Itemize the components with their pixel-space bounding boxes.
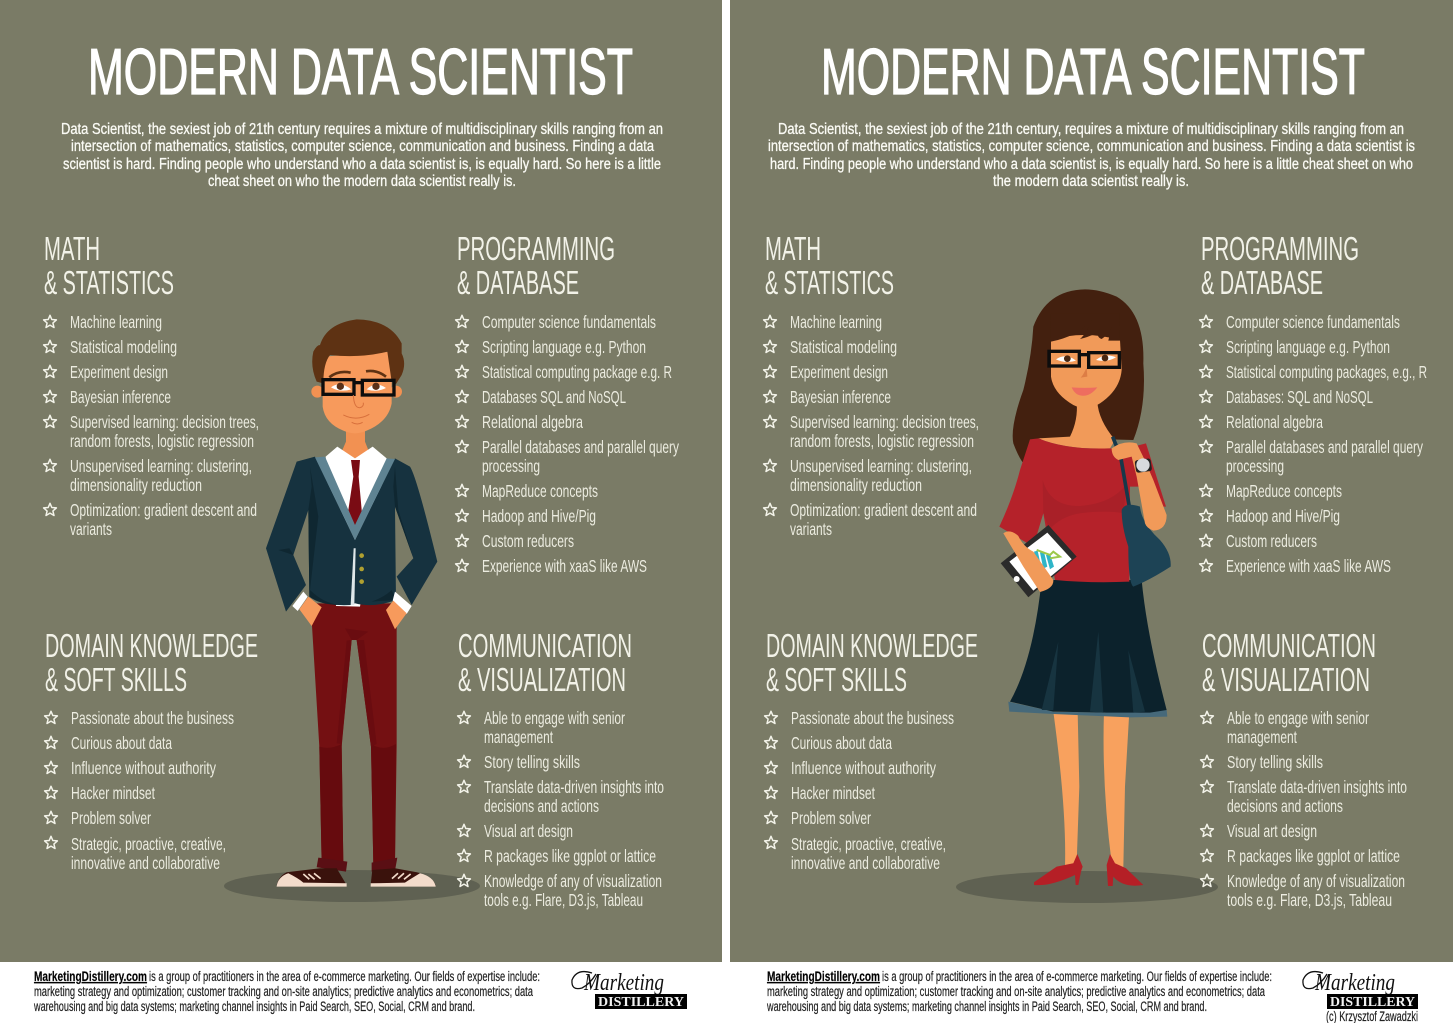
placket <box>351 548 356 605</box>
hair <box>312 319 404 384</box>
list: domain skills (left) <box>45 708 234 873</box>
list: communication skills (right) <box>1201 708 1407 910</box>
footer text: right: warehousing and big data systems; marketing channel insights in Paid Search, SEO, Social, CRM and brand. <box>766 999 1207 1014</box>
list: domain skills (left): Hacker mindset <box>71 783 155 803</box>
top shading <box>1043 480 1127 530</box>
list: communication skills (left): decisions and actions <box>484 796 599 816</box>
list: domain skills (left): Influence without authority <box>71 758 216 778</box>
list: domain skills (right): Hacker mindset <box>791 783 875 803</box>
shoes <box>277 868 436 887</box>
bag <box>1113 437 1171 587</box>
list: programming skills (right): Relational algebra <box>1226 412 1323 432</box>
list: programming skills (left): Parallel databases and parallel query <box>482 437 679 457</box>
heading: programming and database (right): & DATABASE <box>1201 264 1323 301</box>
ground shadow: woman <box>956 871 1218 903</box>
face <box>323 352 392 433</box>
logo: left: Marketing <box>583 970 664 996</box>
list: math skills (right): Optimization: gradient descent and <box>790 500 977 520</box>
list: math skills (right): Supervised learning: decision trees, <box>790 412 979 432</box>
heading: programming and database (left) <box>457 230 615 301</box>
list: programming skills (right): processing <box>1226 456 1284 476</box>
illustration: man lower body <box>277 603 436 887</box>
heading: programming and database (right) <box>1201 230 1359 301</box>
illustration: man upper body <box>266 319 437 629</box>
footer text: right <box>766 969 1272 1014</box>
intro text: right <box>768 121 1415 190</box>
list: communication skills (right): Visual art design <box>1227 821 1317 841</box>
footer text: right: MarketingDistillery.com <box>767 969 880 984</box>
list: communication skills (left): Translate data-driven insights into <box>484 777 664 797</box>
list: communication skills (left): tools e.g. Flare, D3.js, Tableau <box>484 890 643 910</box>
list: programming skills (left): Hadoop and Hive/Pig <box>482 506 596 526</box>
list: math skills (left): random forests, logistic regression <box>70 431 254 451</box>
list: programming skills (left): Relational algebra <box>482 412 583 432</box>
heading: communication and visualization (left): COMMUNICATION <box>458 627 632 664</box>
intro text: left: scientist is hard. Finding people who understand who a data scientist is, is equally hard. So here is a little <box>63 156 661 173</box>
list: math skills (left): Experiment design <box>70 362 168 382</box>
heading: math and statistics (left): & STATISTICS <box>44 264 174 301</box>
list: communication skills (right): Able to engage with senior <box>1227 708 1369 728</box>
footer text: left: marketing strategy and optimization; customer tracking and on-site analytics; predictive analytics and econometrics; data <box>34 984 533 999</box>
list: programming skills (left): Experience with xaaS like AWS <box>482 556 647 576</box>
list: communication skills (left): Able to engage with senior <box>484 708 625 728</box>
list: programming skills (left): Computer science fundamentals <box>482 312 656 332</box>
logo: left: DISTILLERY <box>598 995 684 1010</box>
heading: math and statistics (left) <box>44 230 174 301</box>
nose and mouth <box>343 395 369 424</box>
list: math skills (right): Experiment design <box>790 362 888 382</box>
illustration: woman lower body <box>1008 580 1167 886</box>
shirt <box>326 447 387 607</box>
skirt <box>1010 580 1167 713</box>
footer text: left: is a group of practitioners in the area of e-commerce marketing. Our fields of expertise include: <box>149 969 540 984</box>
title: left: MODERN DATA SCIENTIST <box>88 35 633 108</box>
list: math skills (left): dimensionality reduction <box>70 475 202 495</box>
face <box>1051 335 1122 408</box>
list: math skills (right): Machine learning <box>790 312 882 332</box>
intro text: left <box>61 121 663 190</box>
skirt pleats <box>1042 632 1145 713</box>
heading: math and statistics (right): MATH <box>765 230 821 267</box>
list: domain skills (right): Strategic, proactive, creative, <box>791 834 946 854</box>
list: math skills (right) <box>764 312 979 539</box>
red top <box>999 438 1166 582</box>
nose <box>1081 367 1087 378</box>
footer text: right: is a group of practitioners in the area of e-commerce marketing. Our fields of expertise include: <box>882 969 1272 984</box>
list: domain skills (right) <box>765 708 954 873</box>
heading: communication and visualization (left) <box>458 627 632 698</box>
logo: right: Marketing <box>1314 970 1395 996</box>
illustration: woman upper body <box>999 289 1171 597</box>
list: domain skills (right): Influence without authority <box>791 758 936 778</box>
heading: programming and database (right): PROGRAMMING <box>1201 230 1359 267</box>
heading: domain knowledge and soft skills (right): & SOFT SKILLS <box>766 661 907 698</box>
neck and chest <box>1038 402 1115 449</box>
list: math skills (right): Statistical modeling <box>790 337 897 357</box>
list: programming skills (right): MapReduce concepts <box>1226 481 1342 501</box>
logo: right <box>1303 970 1418 1010</box>
heading: domain knowledge and soft skills (left) <box>45 627 258 698</box>
intro text: right: the modern data scientist really is. <box>993 173 1189 190</box>
trousers <box>311 603 397 872</box>
panel: left background <box>0 0 722 962</box>
logo: right: DISTILLERY <box>1330 995 1415 1010</box>
list: domain skills (right): innovative and collaborative <box>791 853 940 873</box>
list: math skills (right): Bayesian inference <box>790 387 891 407</box>
tie <box>348 460 362 527</box>
heading: math and statistics (right): & STATISTICS <box>765 264 894 301</box>
heading: math and statistics (left): MATH <box>44 230 100 267</box>
list: communication skills (right): Story telling skills <box>1227 752 1323 772</box>
list: programming skills (left): Scripting language e.g. Python <box>482 337 646 357</box>
eyes <box>1056 355 1116 362</box>
hands <box>299 597 407 629</box>
cuffs <box>292 592 412 614</box>
lapels <box>315 457 395 540</box>
intro text: left: cheat sheet on who the modern data scientist really is. <box>208 173 516 190</box>
list: domain skills (left): Passionate about the business <box>71 708 234 728</box>
buttons <box>359 553 364 584</box>
legs <box>1053 712 1129 868</box>
panel: right background <box>730 0 1453 962</box>
list: communication skills (left): Visual art design <box>484 821 573 841</box>
list: communication skills (left) <box>458 708 664 910</box>
list: domain skills (left): Strategic, proactive, creative, <box>71 834 226 854</box>
heading: domain knowledge and soft skills (right) <box>766 627 978 698</box>
heading: domain knowledge and soft skills (left): DOMAIN KNOWLEDGE <box>45 627 258 664</box>
jacket shading <box>278 467 413 605</box>
list: domain skills (right): Problem solver <box>791 808 871 828</box>
footer text: left <box>33 969 540 1014</box>
list: programming skills (left): Statistical computing package e.g. R <box>482 362 672 382</box>
tablet <box>1001 525 1077 597</box>
list: math skills (left): Statistical modeling <box>70 337 177 357</box>
list: math skills (left): Unsupervised learning: clustering, <box>70 456 252 476</box>
list: communication skills (left): R packages like ggplot or lattice <box>484 846 656 866</box>
intro text: left: intersection of mathematics, statistics, computer science, communication and business. Finding a data <box>71 138 654 155</box>
list: domain skills (right): Passionate about the business <box>791 708 954 728</box>
arm with watch <box>1112 442 1167 531</box>
heading: domain knowledge and soft skills (right): DOMAIN KNOWLEDGE <box>766 627 978 664</box>
jacket <box>266 457 437 612</box>
list: programming skills (right): Hadoop and Hive/Pig <box>1226 506 1340 526</box>
list: domain skills (left): Curious about data <box>71 733 172 753</box>
list: math skills (left): Machine learning <box>70 312 162 332</box>
list: communication skills (right): decisions and actions <box>1227 796 1343 816</box>
intro text: left: Data Scientist, the sexiest job of 21th century requires a mixture of multidisciplinary skills ranging from an <box>61 121 663 138</box>
list: programming skills (right): Custom reducers <box>1226 531 1317 551</box>
list: domain skills (left): innovative and collaborative <box>71 853 220 873</box>
list: programming skills (right): Databases: SQL and NoSQL <box>1226 387 1373 407</box>
list: programming skills (left): processing <box>482 456 540 476</box>
heading: programming and database (left): & DATABASE <box>457 264 579 301</box>
list: programming skills (left): Custom reducers <box>482 531 574 551</box>
fringe <box>1051 313 1120 342</box>
list: communication skills (left): Knowledge of any of visualization <box>484 871 662 891</box>
heading: programming and database (left): PROGRAMMING <box>457 230 615 267</box>
list: math skills (left): Supervised learning: decision trees, <box>70 412 259 432</box>
list: domain skills (right): Curious about data <box>791 733 892 753</box>
hair <box>1013 289 1144 463</box>
heading: domain knowledge and soft skills (left): & SOFT SKILLS <box>45 661 187 698</box>
eyes <box>331 383 386 391</box>
list: math skills (left): Optimization: gradient descent and <box>70 500 257 520</box>
list: math skills (left): Bayesian inference <box>70 387 171 407</box>
forearm holding tablet <box>1003 531 1053 592</box>
list: math skills (left): variants <box>70 519 112 539</box>
logo: left <box>572 970 687 1010</box>
footer text: left: MarketingDistillery.com <box>34 969 147 984</box>
eyebrows <box>329 371 386 377</box>
list: math skills (right): dimensionality reduction <box>790 475 922 495</box>
list: programming skills (left) <box>456 312 679 576</box>
heading: math and statistics (right) <box>765 230 894 301</box>
list: math skills (left) <box>44 312 259 539</box>
skirt hem <box>1008 702 1167 717</box>
list: communication skills (left): Story telling skills <box>484 752 580 772</box>
heading: communication and visualization (right) <box>1202 627 1376 698</box>
heading: communication and visualization (left): & VISUALIZATION <box>458 661 626 698</box>
list: programming skills (left): Databases SQL and NoSQL <box>482 387 626 407</box>
list: domain skills (left): Problem solver <box>71 808 151 828</box>
list: communication skills (right): management <box>1227 727 1297 747</box>
lips <box>1072 387 1097 396</box>
list: math skills (right): random forests, logistic regression <box>790 431 974 451</box>
list: programming skills (left): MapReduce concepts <box>482 481 598 501</box>
footer text: left: warehousing and big data systems; marketing channel insights in Paid Search, SEO, Social, CRM and brand. <box>33 999 475 1014</box>
glasses <box>1049 351 1119 367</box>
ground shadow: man <box>224 870 480 902</box>
neck <box>342 428 368 462</box>
glasses <box>323 380 394 395</box>
list: math skills (right): Unsupervised learning: clustering, <box>790 456 972 476</box>
ears <box>311 386 402 398</box>
list: programming skills (right) <box>1200 312 1427 576</box>
shoes <box>1034 854 1143 886</box>
list: communication skills (left): management <box>484 727 553 747</box>
list: math skills (right): variants <box>790 519 832 539</box>
